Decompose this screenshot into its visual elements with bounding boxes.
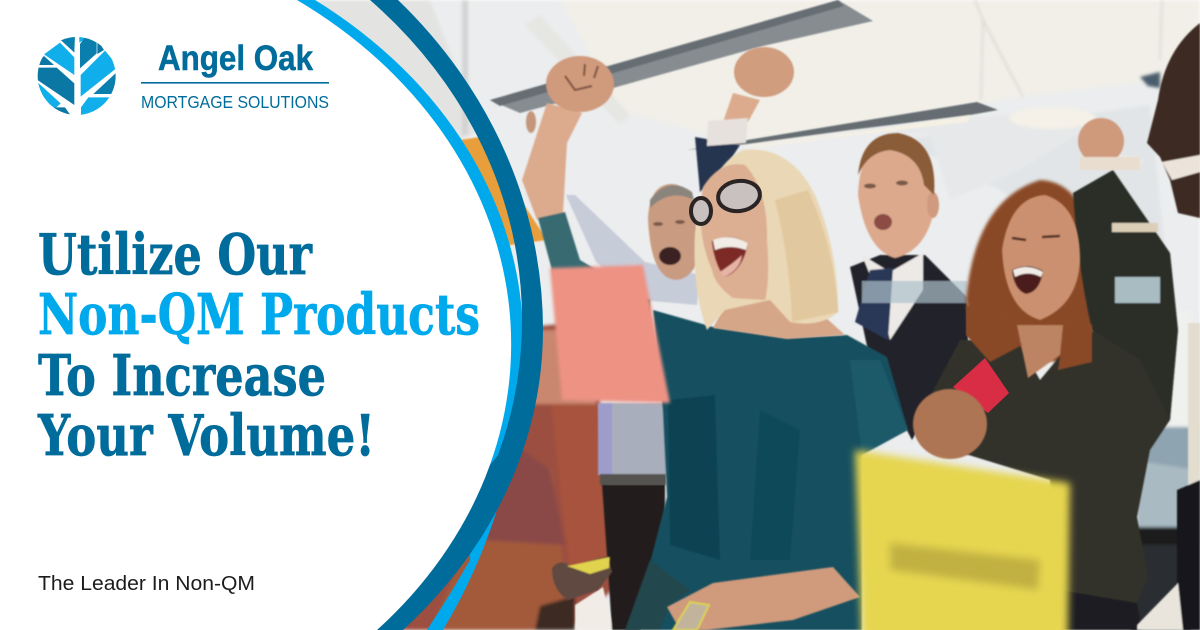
lower arm and hand <box>667 567 860 630</box>
white panel <box>0 0 511 630</box>
tagline: The Leader In Non-QM <box>38 573 255 595</box>
logo <box>35 35 329 118</box>
raised arm and fist <box>522 56 650 330</box>
olive blouse <box>920 170 1178 630</box>
man in suit centre <box>695 47 968 440</box>
headline: Non-QM Products <box>38 282 480 348</box>
dark blue arc <box>360 0 543 630</box>
hand holding card <box>913 389 987 459</box>
man on the right edge <box>1137 23 1200 630</box>
raised fist <box>1078 118 1140 170</box>
person in red shirt <box>400 320 665 630</box>
office background <box>300 0 1200 630</box>
headline: Your Volume! <box>37 403 375 469</box>
hand with yellow note <box>552 556 612 600</box>
glasses <box>691 178 762 224</box>
yellow sticky note <box>855 450 1070 630</box>
teal top <box>625 310 908 630</box>
man behind left <box>526 111 700 485</box>
chest <box>713 290 845 339</box>
hair <box>694 150 838 330</box>
headline: To Increase <box>38 343 326 409</box>
floor and trousers <box>575 484 665 630</box>
open mouth <box>712 237 748 277</box>
blurred note writing <box>890 543 1040 590</box>
logo wordmark: Angel Oak <box>158 39 313 78</box>
pink sticky note <box>550 265 670 403</box>
woman with curly hair <box>913 118 1178 630</box>
icon: oak tree circle <box>38 37 116 115</box>
headline <box>37 222 480 469</box>
logo tagline: MORTGAGE SOLUTIONS <box>141 92 329 112</box>
face and neck <box>700 164 768 300</box>
headline: Utilize Our <box>38 222 313 288</box>
central woman in teal <box>522 56 908 630</box>
ceiling lines and lamp <box>975 0 1162 168</box>
photo: celebrating office team <box>300 0 1200 630</box>
red card <box>953 358 1009 413</box>
neck and face <box>966 195 1092 378</box>
light blue arc <box>0 0 523 630</box>
ceiling light fixtures <box>460 0 998 246</box>
